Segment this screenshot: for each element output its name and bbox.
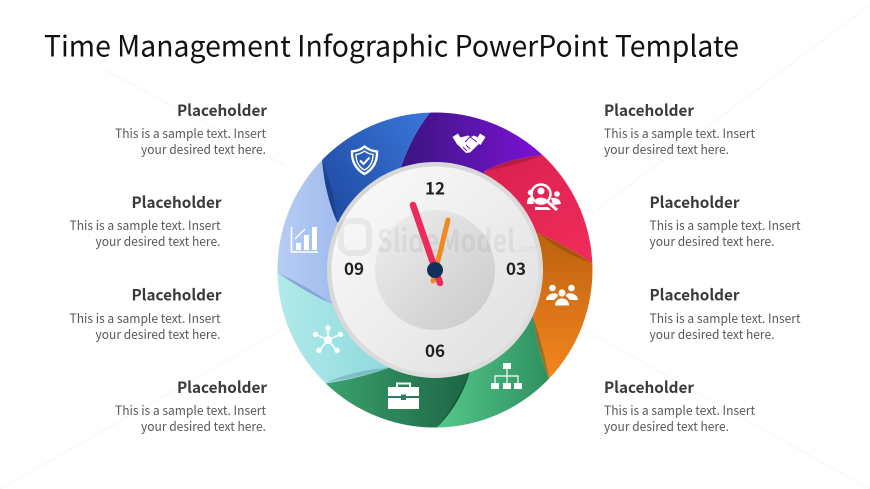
text block: right 2: This is a sample text. Insert (650, 215, 801, 234)
text block: top-left 1: This is a sample text. Insert (115, 123, 266, 142)
text block: bottom-right 4: This is a sample text. Insert (604, 400, 755, 419)
title: Time Management Infographic PowerPoint Template (44, 24, 739, 66)
segment: green (435, 270, 549, 428)
clock hands (413, 205, 448, 283)
segment: red (435, 155, 592, 270)
text block: left 2: This is a sample text. Insert (70, 215, 221, 234)
text block: right 3: your desired text here. (650, 324, 774, 343)
text block: left 2: Placeholder (132, 191, 222, 213)
fold shadows (278, 155, 592, 427)
text block: top-right 1: This is a sample text. Insert (604, 123, 755, 142)
hour labels: 03 (506, 255, 526, 280)
hour labels (344, 174, 526, 362)
text block: right 3: Placeholder (650, 284, 740, 306)
text block: bottom-left 4: This is a sample text. Insert (115, 400, 266, 419)
text block: bottom-left 4: Placeholder (177, 376, 267, 398)
icon: people (546, 285, 578, 306)
watermark: .com (515, 240, 537, 255)
text block: top-left 1: Placeholder (177, 99, 267, 121)
text block: top-left 1 (115, 99, 267, 158)
segment: orange (435, 233, 592, 379)
text block: right 3: This is a sample text. Insert (650, 308, 801, 327)
icon: shield (352, 146, 377, 174)
text block: left 3: This is a sample text. Insert (70, 308, 221, 327)
text block: right 3 (650, 284, 801, 343)
text block: left 3: your desired text here. (96, 324, 220, 343)
text block: left 2: your desired text here. (96, 231, 220, 250)
icon: handshake (452, 134, 486, 153)
icon: org chart (491, 363, 522, 389)
icon: bar chart (292, 227, 318, 252)
segment: light blue (277, 160, 435, 304)
segment: dark green (326, 270, 470, 428)
hour labels: 09 (344, 255, 364, 280)
text block: right 2: your desired text here. (650, 231, 774, 250)
hour labels: 12 (425, 174, 445, 200)
clock face (327, 162, 543, 378)
text block: left 3 (70, 284, 222, 343)
text block: top-right 1 (604, 99, 755, 158)
text block: top-right 1: your desired text here. (604, 139, 729, 158)
clock ring (277, 113, 592, 428)
text block: right 2: Placeholder (650, 191, 740, 213)
text block: bottom-right 4: your desired text here. (604, 416, 729, 435)
text block: bottom-right 4: Placeholder (604, 376, 694, 398)
text block: top-left 1: your desired text here. (141, 139, 266, 158)
hour labels: 06 (425, 337, 445, 362)
icon: search people (527, 184, 561, 210)
segment: teal (278, 270, 435, 383)
text block: top-right 1: Placeholder (604, 99, 694, 121)
text block: right 2 (650, 191, 801, 250)
text block: bottom-right 4 (604, 376, 755, 435)
icon: network (313, 325, 343, 353)
text block: bottom-left 4 (115, 376, 267, 435)
text block: left 2 (70, 191, 222, 250)
text block: bottom-left 4: your desired text here. (141, 416, 266, 435)
segment: purple (401, 113, 543, 270)
text block: left 3: Placeholder (132, 284, 222, 306)
watermark: SlideModel (377, 216, 515, 261)
icon: briefcase (388, 384, 419, 409)
segment: blue (322, 113, 435, 270)
